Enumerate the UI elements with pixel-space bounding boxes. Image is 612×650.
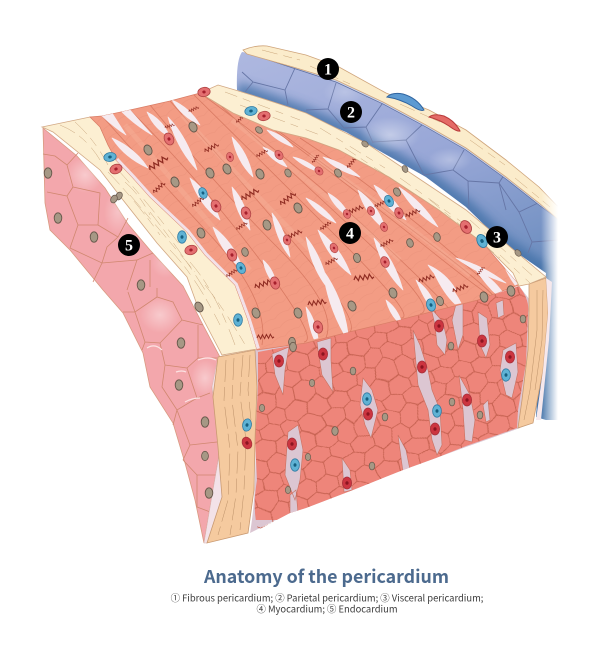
white fade at the right edge of the back layers (541, 190, 558, 426)
lighter fibre highlights (125, 115, 470, 275)
number badge 3 (486, 226, 508, 248)
left band cells (103, 152, 242, 326)
endocardium: pink cell block (43, 128, 220, 543)
fibrous layer on top surface: left band (42, 117, 257, 355)
myocardium: muscle fibres on top surface (85, 85, 525, 355)
blood vessels in fibrous band (387, 93, 460, 131)
right band cells (197, 86, 211, 98)
fibrous pericardium band (243, 46, 565, 222)
number badge 4: 4 (346, 226, 354, 242)
cells in tan section (242, 418, 252, 432)
tan fibrous section at left of cross-section (207, 350, 257, 543)
intercalated discs (148, 106, 485, 339)
title: Anatomy of the pericardium (203, 563, 449, 589)
myocardium: cross-section base (250, 286, 530, 533)
myocardium: cross-section cells (254, 286, 528, 529)
legend text: ① Fibrous pericardium; ② Parietal pericardium; ③ Visceral pericardium; (171, 590, 484, 604)
fibre boundaries (102, 93, 523, 345)
number badge 2 (340, 101, 362, 123)
number badge 5 (118, 234, 140, 256)
number badge 5: 5 (125, 238, 133, 254)
fibre gaps (102, 100, 520, 339)
vessel: artery (429, 115, 460, 131)
number badge 3: 3 (493, 230, 501, 246)
tan fibrous section at right of cross-section (518, 278, 552, 428)
muscle red and blue cells (162, 131, 437, 334)
number badge 2: 2 (347, 104, 355, 122)
striations (100, 100, 506, 346)
section cells: cell nuclei (259, 315, 526, 494)
back layer: parietal pericardium (blue cells) (237, 52, 575, 420)
interstitial gaps between cell clusters (272, 300, 518, 515)
vessel: vein (387, 93, 424, 110)
number badge 1: 1 (324, 62, 332, 78)
muscle nuclei (142, 121, 516, 352)
fibrous layer on top surface: right band (197, 85, 546, 286)
legend text: ④ Myocardium; ⑤ Endocardium (256, 602, 398, 616)
pale strip between endocardium and section (204, 356, 224, 543)
pale strip beside band (116, 160, 257, 349)
number badge 1 (317, 58, 339, 80)
nuclei at endocardium (44, 168, 213, 498)
infographic: anatomy of the pericardium (40, 45, 557, 615)
number badge 4 (339, 222, 361, 244)
